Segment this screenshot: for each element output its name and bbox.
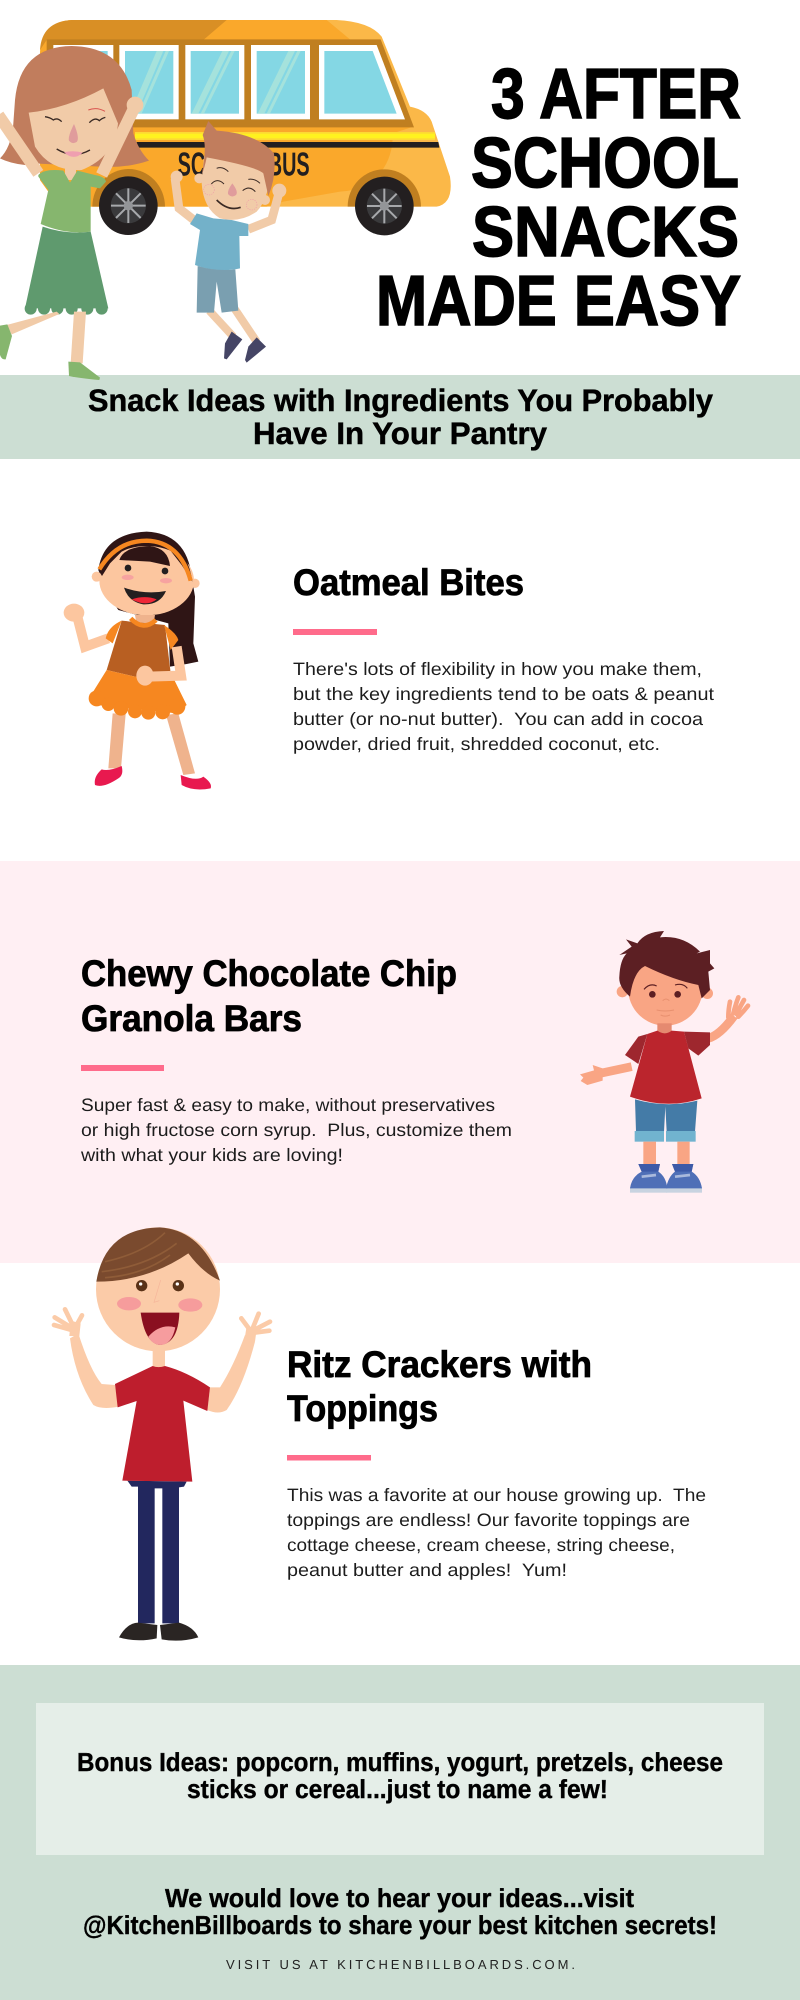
call to action: We would love to hear your ideas...visit [165, 1883, 634, 1913]
body text: This was a favorite at our house growing up. The [287, 1485, 706, 1505]
heading [287, 1344, 592, 1429]
website line: VISIT US AT KITCHENBILLBOARDS.COM. [226, 1957, 575, 1972]
subtitle: Snack Ideas with Ingredients You Probably [88, 383, 714, 418]
accent rule [287, 1455, 371, 1460]
body text: Super fast & easy to make, without preservatives [81, 1095, 495, 1115]
body text: butter (or no-nut butter). You can add in cocoa [293, 709, 704, 729]
panel: granola bars [0, 861, 800, 1263]
illustration: school bus [40, 20, 451, 235]
heading [81, 953, 457, 1039]
subtitle [88, 383, 714, 451]
illustration: school bus: SCHOOL BUS [178, 146, 310, 183]
panel: footer [0, 1665, 800, 2000]
callout: bonus ideas: Bonus Ideas: popcorn, muffins, yogurt, pretzels, cheese [77, 1747, 723, 1777]
call to action [83, 1883, 717, 1940]
illustration: jumping boy [171, 121, 286, 363]
illustration: waving boy [580, 931, 748, 1193]
accent rule [81, 1065, 164, 1071]
accent rule [293, 629, 377, 635]
panel: oatmeal bites [64, 532, 714, 789]
body text: toppings are endless! Our favorite toppings are [287, 1510, 690, 1530]
body text [293, 659, 714, 754]
heading: Oatmeal Bites [293, 562, 524, 603]
illustration: excited boy [54, 1227, 270, 1641]
illustration: girl with orange dress [64, 532, 211, 789]
title: SNACKS [472, 193, 739, 272]
panel: subtitle band [0, 375, 800, 459]
body text: or high fructose corn syrup. Plus, customize them [81, 1120, 512, 1140]
title [376, 55, 741, 341]
heading: Chewy Chocolate Chip [81, 953, 457, 994]
body text: There's lots of flexibility in how you make them, [293, 659, 702, 679]
body text: peanut butter and apples! Yum! [287, 1560, 567, 1580]
heading: Ritz Crackers with [287, 1344, 592, 1385]
body text: but the key ingredients tend to be oats & peanut [293, 684, 714, 704]
body text [287, 1485, 706, 1580]
call to action: @KitchenBillboards to share your best kitchen secrets! [83, 1910, 717, 1940]
title: 3 AFTER [491, 55, 741, 134]
subtitle: Have In Your Pantry [253, 416, 548, 451]
title: SCHOOL [471, 124, 739, 203]
body text: powder, dried fruit, shredded coconut, etc. [293, 734, 660, 754]
heading: Toppings [287, 1388, 438, 1429]
heading: Granola Bars [81, 998, 302, 1039]
body text: with what your kids are loving! [80, 1145, 343, 1165]
illustration: mother jumping [0, 46, 149, 380]
callout: bonus ideas [36, 1703, 764, 1855]
title: MADE EASY [376, 262, 741, 341]
body text: cottage cheese, cream cheese, string cheese, [287, 1535, 675, 1555]
panel: ritz crackers [54, 1227, 706, 1641]
body text [80, 1095, 512, 1165]
callout: bonus ideas: sticks or cereal...just to name a few! [187, 1774, 608, 1804]
